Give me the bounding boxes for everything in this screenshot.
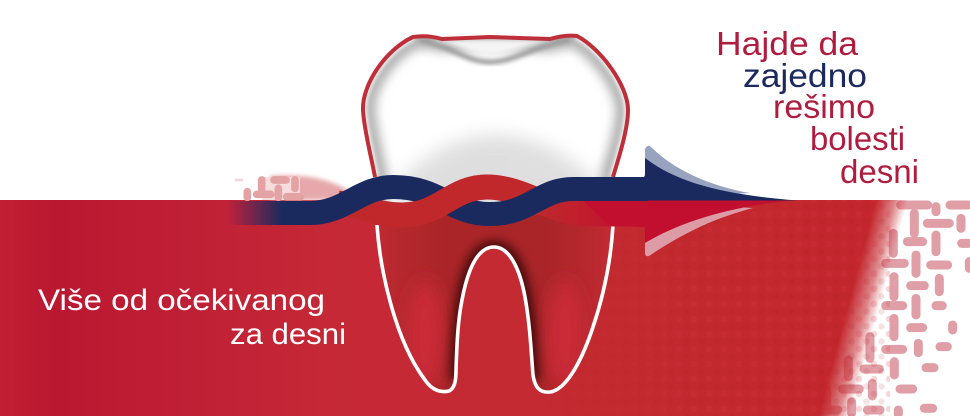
caption: left: za desni <box>230 318 346 351</box>
caption: left: Više od očekivanog <box>38 284 325 317</box>
tooth root <box>370 210 620 400</box>
red ribbon (lower layer) <box>338 187 660 215</box>
caption: left <box>38 284 346 351</box>
gum band <box>0 200 970 416</box>
heading: right: Hajde da <box>716 25 859 62</box>
heading: right <box>716 25 919 190</box>
pink bone pattern: left of ribbon above gum <box>236 175 356 200</box>
crown outline <box>363 36 628 177</box>
navy ribbon and arrowhead <box>228 146 797 214</box>
tooth crown <box>360 30 632 210</box>
heading: right: bolesti <box>810 120 905 157</box>
heading: right: rešimo <box>773 88 875 125</box>
pink bone pattern: right edge <box>817 205 969 414</box>
heading: right: desni <box>840 153 919 190</box>
root outline <box>377 225 613 392</box>
heading: right: zajedno <box>743 57 867 94</box>
arrow highlight: blue-grey <box>645 146 750 196</box>
red ribbon crossing over navy <box>403 187 487 215</box>
red arrowhead <box>583 200 797 256</box>
arrow highlight: pink <box>645 205 753 256</box>
